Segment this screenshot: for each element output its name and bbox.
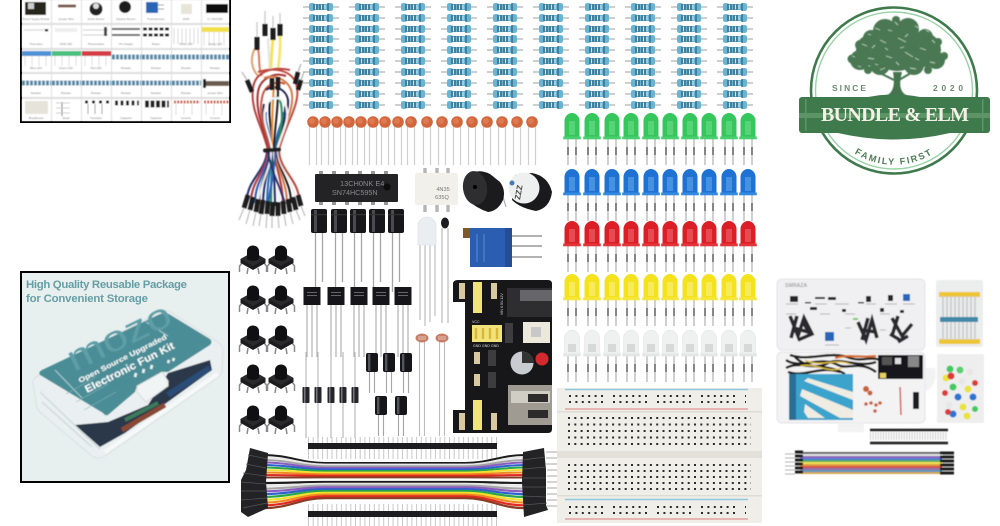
jumper ribbon	[785, 452, 954, 474]
thumbnail captions: Ceramic	[181, 116, 192, 120]
box lid text: Open Source Upgraded	[77, 332, 168, 385]
row 5 thumbnails	[25, 101, 229, 116]
thumbnail captions: Resistor	[61, 91, 71, 95]
blue LEDs	[563, 169, 757, 221]
thumbnail captions: Red LED	[90, 66, 102, 70]
ceramic capacitors	[307, 116, 538, 165]
header strips	[870, 430, 948, 443]
rainbow jumper ribbon	[241, 448, 558, 517]
thumbnail captions: Passive Buzzer	[116, 17, 136, 21]
panel heading	[26, 279, 187, 305]
ribbon strand set 2	[263, 482, 525, 508]
wires in case	[786, 355, 880, 374]
USB port	[508, 385, 552, 425]
since label: SINCE	[832, 83, 866, 93]
thumbnail captions: Transistor	[90, 116, 102, 120]
box lid text	[77, 332, 177, 396]
jumper wire bundle	[239, 11, 305, 228]
LED bag	[937, 354, 984, 423]
logo: Bundle & Elm	[799, 6, 990, 175]
row 3 thumbnails	[22, 51, 229, 66]
power rail lines	[565, 390, 748, 500]
IC chip: 13CH0NK E4	[340, 179, 384, 188]
module in case	[878, 355, 923, 379]
capacitor and LED	[510, 352, 548, 374]
brand text: SMRAZA	[785, 283, 808, 289]
thumbnail captions: Resistor	[91, 91, 101, 95]
top connectors	[242, 11, 304, 92]
thumbnail captions: Resistor	[151, 66, 161, 70]
barrel jack	[507, 288, 552, 317]
bottom wires	[247, 150, 299, 206]
tagline on arc: FAMILY FIRST	[855, 148, 930, 165]
thumbnail captions: Ceramic	[210, 116, 221, 120]
banner: BUNDLE & ELM	[821, 104, 969, 126]
thumbnail captions: Power Supply Module	[22, 17, 50, 21]
photoresistors	[416, 334, 448, 436]
red LEDs	[563, 221, 757, 272]
passive buzzer	[508, 172, 552, 211]
passive buzzer: ZZZ	[513, 184, 525, 200]
switch	[523, 322, 550, 343]
breadboard	[557, 388, 762, 523]
left connectors	[241, 448, 268, 517]
thumbnail captions: Photoresistor	[88, 42, 104, 46]
IC chip	[315, 171, 398, 205]
icon: plastic storage box	[33, 293, 223, 458]
resistor rows	[303, 3, 753, 109]
year label: 2020	[933, 83, 963, 93]
right connectors	[522, 448, 558, 517]
optocoupler	[415, 168, 458, 212]
yellow LEDs	[563, 274, 757, 326]
panel: reusable package photo	[21, 272, 229, 482]
module labels	[472, 293, 504, 348]
thumbnail captions: RGB LED	[60, 42, 72, 46]
row 4 thumbnails	[22, 79, 229, 88]
thumbnail captions	[22, 17, 223, 120]
RGB LED	[418, 217, 436, 326]
thumbnail captions: Resistor	[181, 66, 191, 70]
top wires	[252, 36, 280, 76]
pin header bottom	[308, 511, 497, 517]
module labels: VCC	[472, 320, 480, 324]
thumbnail captions: 4N35	[183, 17, 190, 21]
white LEDs	[563, 330, 757, 382]
thumbnail captions: Resistor	[121, 91, 131, 95]
active buzzer	[461, 169, 506, 212]
parts compartments	[790, 295, 904, 313]
IC chip: SN74HC595N	[332, 188, 378, 197]
module labels: GND GND GND	[473, 344, 499, 348]
thumbnail captions: Capacitor	[150, 116, 162, 120]
ceramic bag	[863, 386, 882, 413]
thumbnail captions: Capacitor	[120, 116, 132, 120]
boxed breadboard card	[789, 374, 853, 420]
thumbnail captions: IC 74HC595	[207, 17, 223, 21]
bottom connectors	[239, 195, 305, 228]
thumbnail captions: Resistor	[31, 91, 41, 95]
storage case	[777, 279, 936, 432]
jumper and headers	[472, 282, 502, 430]
panel heading: High Quality Reusable Package	[26, 279, 187, 291]
thermistor	[441, 218, 449, 323]
tactile buttons	[240, 246, 294, 434]
thumbnail captions: Active Buzzer	[87, 17, 105, 21]
thumbnail captions: Blue LED	[30, 66, 42, 70]
loop wires	[253, 69, 297, 150]
electrolytic capacitors	[311, 209, 404, 292]
thumbnail captions: White LED	[179, 42, 193, 46]
kit package photo	[777, 279, 984, 474]
thumbnail captions: Diode	[62, 116, 70, 120]
box lid text: Electronic Fun Kit	[83, 340, 177, 396]
optocoupler: 4N35	[436, 187, 450, 193]
transistors	[304, 287, 412, 357]
small capacitors	[366, 353, 412, 436]
thumbnail captions: Resistor	[151, 91, 161, 95]
holes	[568, 396, 751, 513]
diodes	[302, 352, 358, 438]
thumbnail captions: Breadboard	[29, 116, 44, 120]
green LEDs	[563, 113, 757, 165]
thumbnail captions: Resistor	[121, 66, 131, 70]
row 1 thumbnails	[25, 1, 228, 16]
thumbnail captions: Thermistor	[29, 42, 43, 46]
pin header top	[308, 443, 497, 449]
thumbnail captions: Resistor	[181, 91, 191, 95]
icon: elm tree	[848, 16, 948, 96]
thumbnail captions: Pin Header	[119, 42, 133, 46]
LED rows	[563, 113, 757, 382]
resistor bag	[936, 280, 983, 347]
panel heading: for Convenient Storage	[26, 293, 148, 305]
potentiometer	[463, 228, 542, 267]
ribbon strand set 1	[263, 455, 525, 478]
row 2 thumbnails	[24, 27, 229, 46]
thumbnail captions: Potentiometer	[147, 17, 165, 21]
thumbnail captions: Jumper Wire	[58, 17, 74, 21]
module labels: VIN 6.5V-12V	[500, 293, 504, 315]
thumbnail captions: Button	[152, 42, 160, 46]
IC bag	[900, 387, 919, 415]
banner	[799, 94, 990, 140]
power supply module	[453, 280, 552, 433]
box lid watermark: mozo	[60, 293, 178, 379]
optocoupler: 635Q	[435, 195, 449, 201]
thumbnail captions: Yellow LED	[208, 42, 222, 46]
thumbnail captions: Jumper Wire	[207, 91, 223, 95]
thumbnail captions: Resistor	[210, 66, 220, 70]
panel: kit contents grid	[21, 0, 230, 122]
thumbnail captions: Green LED	[59, 66, 73, 70]
